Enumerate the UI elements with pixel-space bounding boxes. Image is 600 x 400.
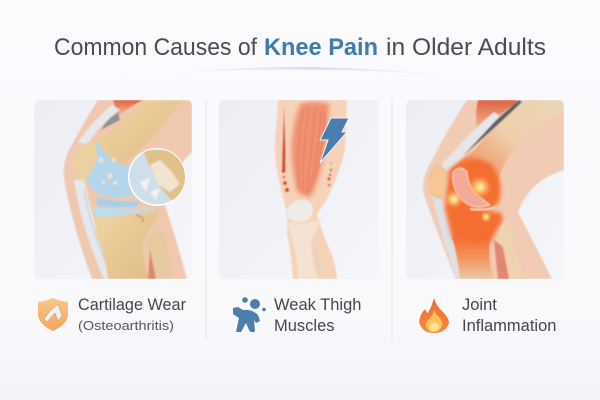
muscle at top	[476, 100, 518, 127]
inner condyle	[453, 168, 490, 207]
femur	[450, 100, 564, 190]
patella	[429, 165, 446, 198]
skin	[423, 100, 564, 279]
shadow under tendon	[101, 112, 120, 130]
inflamed joint blob	[445, 159, 503, 246]
red pain line and drops	[282, 107, 332, 192]
tendon lower	[74, 180, 112, 279]
fibula	[499, 221, 525, 279]
shin bones	[287, 220, 322, 279]
label: cartilage wear: (Osteoarthritis)	[78, 318, 174, 333]
label: joint inflammation: Joint	[462, 296, 497, 314]
title	[54, 34, 546, 61]
panel: joint inflammation illustration	[406, 100, 564, 279]
worn cartilage flecks	[98, 158, 117, 185]
thigh muscle fan	[292, 102, 329, 198]
tendon band	[437, 112, 500, 170]
dark tendon gap	[464, 100, 522, 154]
tibial cartilage plate	[96, 197, 140, 207]
panel: cartilage wear illustration	[34, 100, 192, 279]
icon: lightning bolt	[320, 118, 349, 163]
title: Knee Pain	[264, 34, 378, 61]
tendon upper	[78, 105, 120, 144]
label: joint inflammation: Inflammation	[462, 317, 556, 335]
kneecap	[286, 200, 313, 222]
tibia bone	[95, 210, 158, 279]
panel: weak thigh muscles illustration	[219, 100, 379, 279]
title: Common Causes of	[54, 34, 257, 61]
icon: cartilage shield	[38, 298, 68, 331]
meniscus	[470, 207, 496, 210]
muscle at top of thigh	[113, 100, 143, 116]
magnifier inset	[128, 148, 190, 206]
label: weak thigh muscles: Weak Thigh	[274, 296, 361, 314]
label: cartilage wear	[78, 296, 186, 333]
label: cartilage wear: Cartilage Wear	[78, 296, 186, 314]
label: weak thigh muscles: Muscles	[274, 317, 335, 335]
skin: bent knee	[64, 100, 192, 279]
femur bone	[98, 100, 182, 166]
patella	[73, 141, 97, 181]
blue cartilage	[87, 140, 134, 198]
title: in Older Adults	[386, 34, 546, 61]
leg skin	[275, 100, 347, 279]
lower shin	[452, 236, 494, 279]
icon: flame	[419, 298, 449, 333]
icon: weak muscle figure	[233, 297, 266, 332]
fibula	[146, 231, 172, 279]
inflammation glows	[444, 175, 492, 223]
